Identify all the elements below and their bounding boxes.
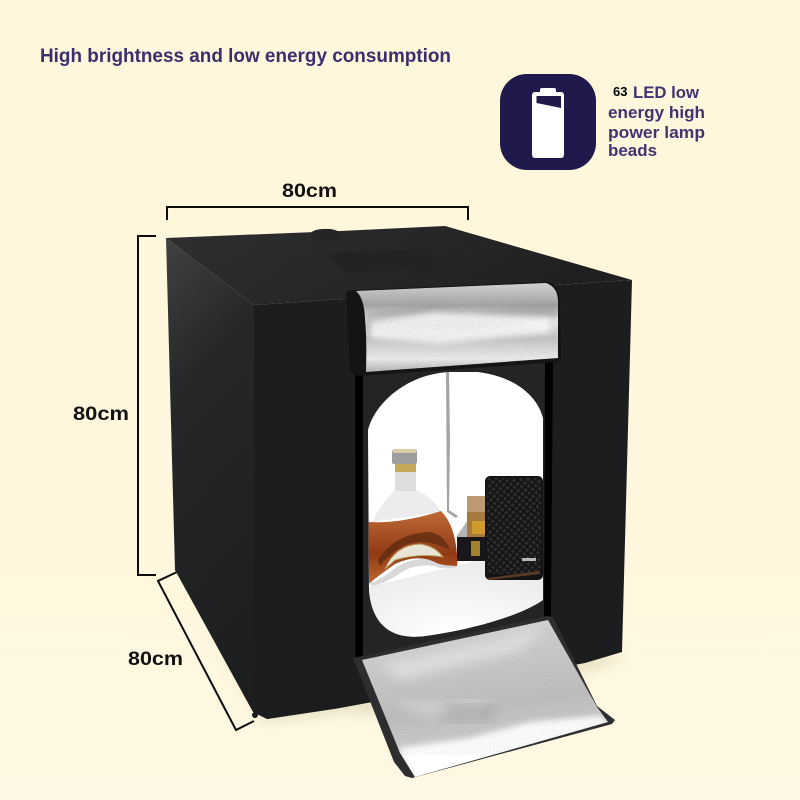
callout text: power lamp (608, 123, 705, 142)
bottle (368, 449, 457, 586)
light box (166, 226, 632, 780)
front opening (354, 358, 553, 660)
neck (395, 472, 416, 491)
dark shape in liquor (378, 532, 450, 566)
lit interior (368, 372, 543, 637)
icon: battery (500, 74, 596, 170)
dimension: width 80cm (167, 180, 468, 220)
dimension: depth 80cm: 80cm (128, 648, 183, 670)
glass base (369, 559, 456, 586)
front panel (254, 280, 632, 719)
callout text: 63 (613, 84, 627, 99)
callout text: energy high (608, 103, 705, 122)
top panel (166, 226, 632, 305)
silver roll-up flap (346, 280, 565, 376)
interior seam (446, 372, 458, 518)
bottle glass shoulders (372, 490, 441, 522)
callout text (608, 83, 705, 160)
silver front flap (353, 615, 615, 780)
corner knob (252, 712, 258, 718)
liquor (368, 511, 457, 583)
callout: LED lamp beads (500, 74, 705, 170)
label (385, 544, 443, 569)
wallet (485, 476, 543, 580)
book stack (456, 496, 485, 561)
dimension: width 80cm: 80cm (282, 180, 337, 202)
cap (392, 450, 417, 464)
dimension: height 80cm: 80cm (73, 403, 129, 425)
callout text: LED low (633, 83, 700, 102)
floor shadow (200, 620, 625, 722)
title: High brightness and low energy consumption (40, 45, 451, 67)
dimension: depth 80cm (128, 572, 254, 730)
shelf floor (369, 560, 545, 640)
top handle and window (310, 229, 440, 272)
left side panel (166, 238, 340, 719)
dimension: height 80cm (73, 236, 156, 575)
callout text: beads (608, 141, 657, 160)
